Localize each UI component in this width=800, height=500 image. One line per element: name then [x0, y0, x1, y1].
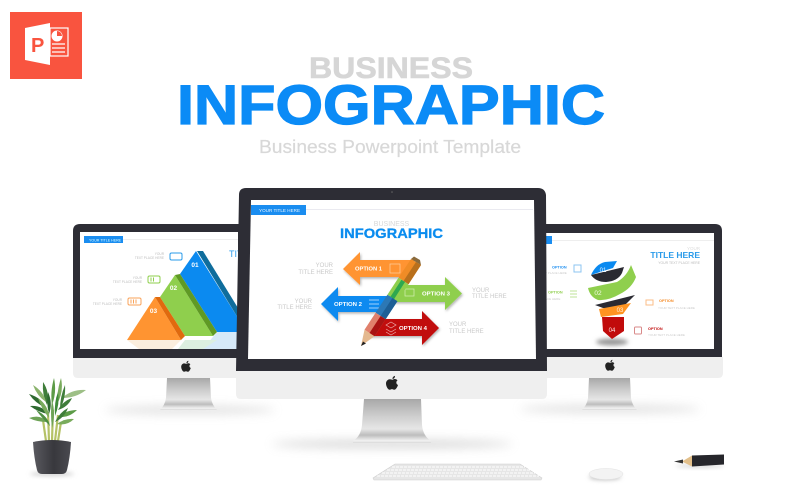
label: option 3 title: YOUR [472, 288, 490, 294]
pyramid label 03: 03 [150, 308, 157, 315]
right monitor bezel [545, 224, 722, 357]
center slide title: BUSINESS [374, 221, 410, 228]
left title fragment: TITLE HERE [229, 249, 281, 259]
center monitor bezel [236, 188, 547, 371]
option 2 arrow: OPTION 2 [334, 302, 362, 308]
row: blue battery: TEXT PLACE HERE [135, 256, 164, 260]
center slide header bar [251, 205, 533, 215]
left monitor logo [181, 361, 191, 372]
option: orange [646, 299, 695, 310]
light bulb chart [588, 261, 636, 346]
row: orange battery: YOUR [113, 298, 123, 302]
bulb label 03: 03 [617, 308, 624, 314]
plant shadow [30, 472, 74, 476]
subtitle: Business Powerpoint Template [259, 137, 521, 157]
row: green battery: YOUR [133, 276, 143, 280]
center monitor stand [353, 399, 431, 443]
option: red [634, 327, 685, 337]
option: blue: OPTION [552, 266, 567, 270]
logo: PowerPoint badge: P [31, 35, 44, 57]
right monitor logo [605, 360, 615, 371]
option: green [545, 290, 577, 301]
left monitor screen [80, 232, 238, 349]
option: orange: OPTION [659, 299, 674, 303]
right slide title [650, 246, 701, 265]
option: blue [545, 265, 581, 275]
label: option 1 title [298, 263, 334, 276]
left monitor bezel [73, 224, 240, 358]
option 2 arrow [321, 287, 392, 321]
pyramid chart [127, 251, 238, 349]
right monitor [520, 224, 723, 412]
option 4 arrow: OPTION 4 [399, 326, 427, 332]
label: option 1 title: YOUR [316, 263, 334, 269]
pyramid label 01: 01 [191, 262, 199, 269]
label: option 4 title [449, 322, 484, 335]
option 3 arrow: OPTION 3 [422, 292, 450, 298]
black pencil [674, 454, 724, 468]
label: option 2 title [277, 299, 313, 311]
left monitor [73, 224, 281, 414]
left monitor chin [73, 357, 240, 378]
right monitor screen [545, 233, 714, 349]
bulb label 01: 01 [600, 268, 607, 274]
potted plant [29, 378, 86, 476]
row: green battery: TEXT PLACE HERE [113, 280, 142, 284]
center monitor camera [391, 191, 393, 193]
row: green battery [113, 276, 160, 284]
bulb label 04: 04 [609, 328, 616, 334]
label: option 1 title: TITLE HERE [298, 270, 333, 276]
center slide header bar: YOUR TITLE HERE [259, 208, 300, 213]
center monitor [236, 188, 547, 448]
option: blue: Y PLACE HERE [545, 271, 567, 275]
right monitor stand [582, 378, 637, 410]
option: red: YOUR TEXT PLACE HERE [648, 333, 685, 337]
row: blue battery: YOUR [155, 252, 165, 256]
logo: PowerPoint badge [10, 12, 82, 79]
option 1 arrow [343, 252, 415, 285]
row: blue battery [135, 252, 182, 260]
right slide title: YOUR [687, 246, 701, 251]
center monitor chin [236, 369, 547, 399]
center monitor logo [386, 376, 398, 390]
label: option 4 title: TITLE HERE [449, 329, 484, 335]
option 4 arrow [368, 311, 439, 345]
center monitor shadow [272, 440, 512, 448]
left monitor stand [160, 378, 217, 410]
option 1 arrow: OPTION 1 [355, 266, 382, 272]
option: green: ACE HERE [545, 297, 560, 301]
pencil [361, 256, 421, 346]
right slide title: YOUR TEXT PLACE HERE [658, 261, 701, 265]
plant pot [33, 440, 71, 474]
option: orange: YOUR TEXT PLACE HERE [658, 306, 695, 310]
right monitor chin [545, 357, 723, 378]
option 3 arrow [390, 277, 462, 310]
left slide header bar [84, 236, 238, 243]
option: red: OPTION [648, 327, 663, 331]
plant stems [43, 410, 61, 441]
label: option 3 title: TITLE HERE [472, 294, 507, 300]
plant leaves [29, 378, 86, 428]
keyboard [373, 464, 542, 480]
label: option 3 title [472, 288, 507, 300]
right slide title: TITLE HERE [650, 250, 700, 260]
row: orange battery [93, 298, 141, 306]
pyramid label 02: 02 [170, 285, 177, 292]
label: option 2 title: TITLE HERE [277, 305, 312, 311]
row: orange battery: TEXT PLACE HERE [93, 302, 122, 306]
center monitor screen [248, 200, 536, 359]
heading: INFOGRAPHIC: INFOGRAPHIC [177, 73, 605, 136]
label: option 2 title: YOUR [295, 299, 313, 305]
mouse [589, 468, 623, 480]
right monitor shadow [520, 406, 700, 412]
left slide header bar: YOUR TITLE HERE [89, 238, 122, 242]
center slide title: INFOGRAPHIC [340, 225, 443, 241]
option: green: OPTION [548, 290, 563, 294]
bulb label 02: 02 [594, 290, 602, 297]
heading: BUSINESS: BUSINESS [309, 52, 473, 85]
label: option 4 title: YOUR [449, 322, 467, 328]
left monitor shadow [105, 406, 275, 414]
